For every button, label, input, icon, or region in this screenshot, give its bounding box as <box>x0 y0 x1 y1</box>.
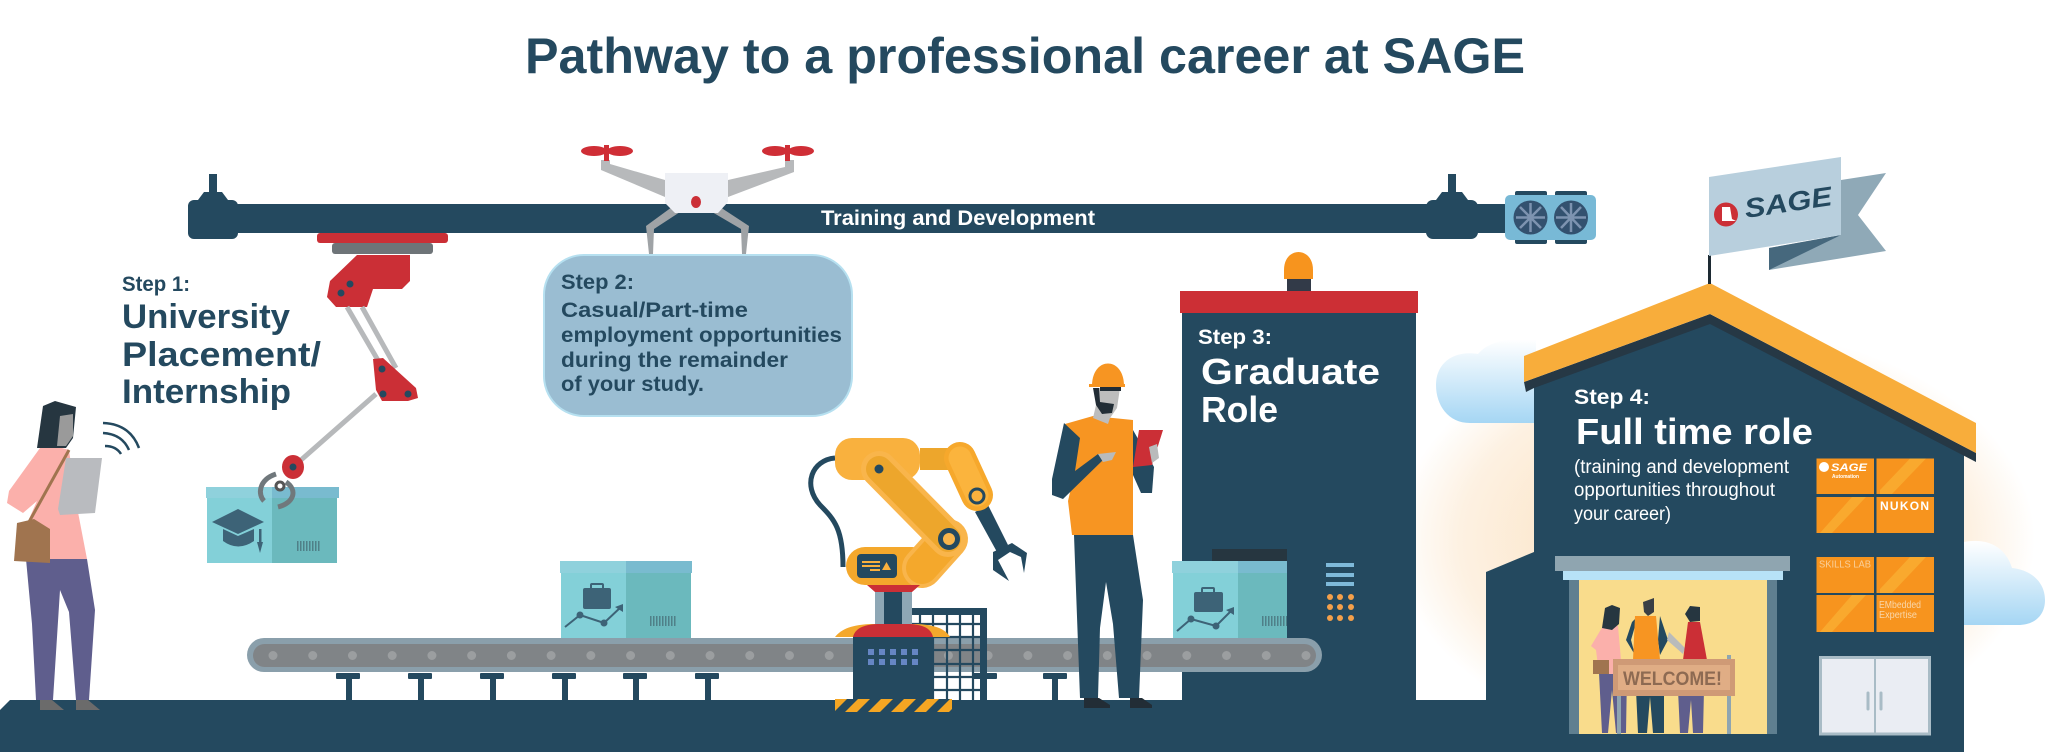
callout: step 2 <box>544 255 852 416</box>
roof <box>1524 283 1976 453</box>
figure: engineer with clipboard <box>1052 364 1163 708</box>
embedded expertise label <box>1879 600 1921 621</box>
beacon light <box>1284 252 1313 279</box>
machine: step 3 column <box>1180 252 1418 700</box>
icon: briefcase and chart <box>1177 588 1234 631</box>
hard hat <box>1092 364 1124 386</box>
icon: wifi signal <box>103 423 139 454</box>
step 4 text: Step 4: <box>1574 386 1650 409</box>
step 3 text: Graduate <box>1201 351 1380 392</box>
callout: step 2: during the remainder <box>561 349 788 372</box>
callout: step 2: of your study. <box>561 373 704 396</box>
drone <box>581 145 814 254</box>
robot gripper <box>975 505 1008 552</box>
barcode <box>650 616 676 626</box>
hazard stripe <box>835 699 952 712</box>
icon: graduation cap <box>212 509 264 553</box>
sage automation logo: SAGE <box>1831 462 1868 474</box>
embedded expertise label: EMbedded <box>1879 600 1921 611</box>
double door <box>1820 657 1930 734</box>
embedded expertise label: Expertise <box>1879 610 1917 621</box>
callout: step 2: Step 2: <box>561 271 634 294</box>
conveyor belt <box>247 638 1322 672</box>
icon: twin cooling fans <box>1505 191 1596 244</box>
control panel dots <box>868 649 918 665</box>
step 4 text: (training and development <box>1574 457 1790 478</box>
step 3 text: Step 3: <box>1198 326 1272 349</box>
beam label: Training and Development <box>821 207 1095 230</box>
box: career growth <box>560 561 692 638</box>
conveyor legs <box>336 673 1067 700</box>
cloud: right of house <box>1964 541 2045 625</box>
icon: briefcase and chart <box>565 584 623 627</box>
robot arm: overhead red arm <box>282 233 448 479</box>
welcome sign <box>1613 655 1735 734</box>
figure: student with tablet <box>7 401 139 710</box>
windows: upper company panes <box>1816 458 1934 533</box>
nukon logo: NUKON <box>1880 499 1929 513</box>
step 3 text <box>1198 326 1380 430</box>
sage automation logo: Automation <box>1832 474 1859 480</box>
box: graduation cap <box>206 487 339 563</box>
callout: step 2: Casual/Part-time <box>561 299 748 322</box>
step 4 text: your career) <box>1574 504 1671 525</box>
callout: step 2: employment opportunities <box>561 324 842 347</box>
person: woman in red <box>1667 606 1707 733</box>
building entrance with welcome team <box>1555 556 1790 734</box>
step 1 text: Step 1: <box>122 273 190 296</box>
step 1 text: Placement/ <box>122 336 322 374</box>
windows: lower company panes <box>1816 557 1934 632</box>
yellow industrial robot <box>811 438 1027 699</box>
cloud: left of house <box>1436 339 1536 423</box>
overhead beam: Training and Development <box>188 174 1510 239</box>
step 3 text: Role <box>1201 389 1278 430</box>
propellers <box>581 145 814 161</box>
robot cable <box>811 458 843 567</box>
wire safety fence <box>912 612 984 700</box>
step 1 text <box>122 273 322 411</box>
step 1 text: Internship <box>122 373 291 411</box>
box: entering machine <box>1172 561 1287 638</box>
barcode <box>1262 616 1287 626</box>
background glow behind house <box>1395 329 2035 751</box>
skills lab label: SKILLS LAB <box>1819 560 1871 570</box>
flag: SAGE <box>1708 157 1886 284</box>
barcode <box>297 541 321 551</box>
sage automation logo <box>1819 462 1868 480</box>
robot gripper holding box <box>260 474 293 507</box>
person: woman in pink <box>1591 605 1627 733</box>
roof underside <box>1524 314 1976 462</box>
control sliders <box>1326 565 1354 584</box>
welcome sign: WELCOME! <box>1623 669 1722 690</box>
person: man in vest <box>1626 598 1668 733</box>
step 4 text: Full time role <box>1576 411 1813 452</box>
step 1 text: University <box>122 298 290 336</box>
floor <box>0 700 1964 752</box>
house: step 4 <box>1486 283 1976 752</box>
step 4 text <box>1574 386 1813 525</box>
control dots <box>1327 594 1354 621</box>
step 4 text: opportunities throughout <box>1574 480 1776 501</box>
title: Pathway to a professional career at SAGE <box>525 28 1525 84</box>
flag: SAGE: SAGE <box>1742 181 1835 224</box>
